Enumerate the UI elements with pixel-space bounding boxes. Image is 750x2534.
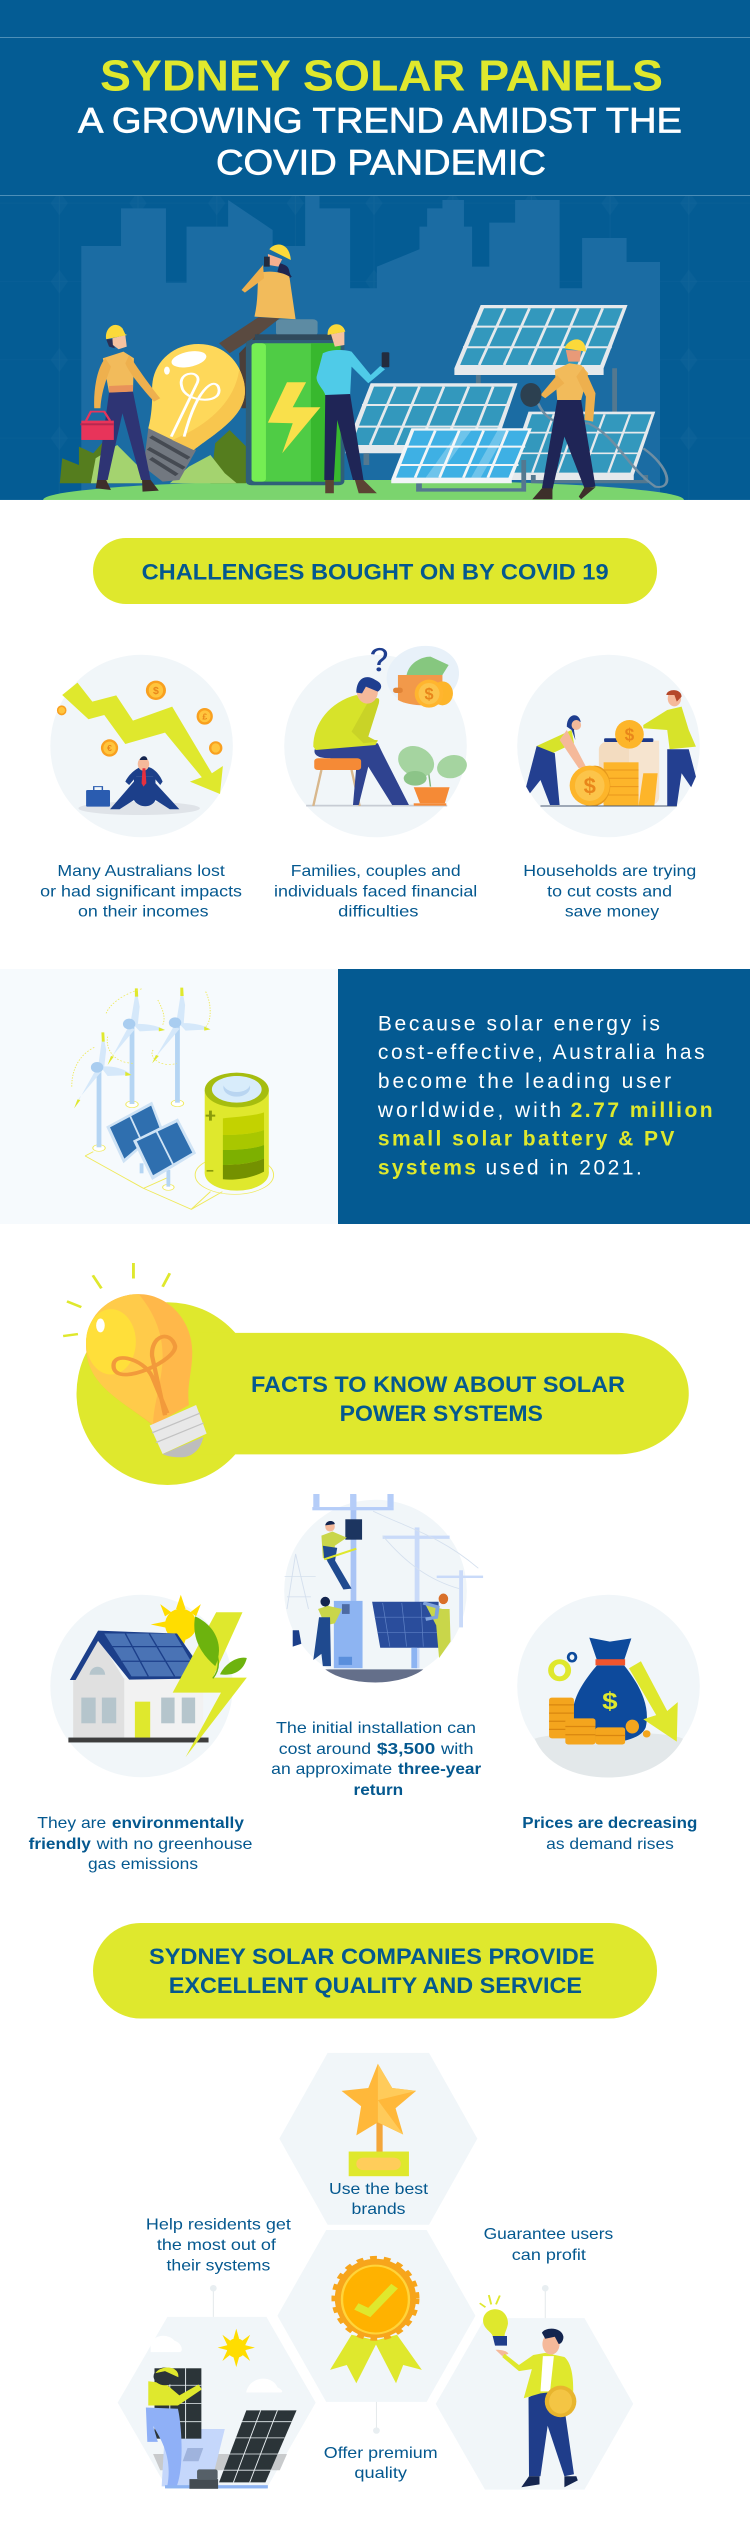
icon: house with solar roof and lightning bolt (68, 1595, 247, 1757)
caption: cost around (279, 1741, 371, 1758)
stat text: 2.77 million (571, 1099, 713, 1122)
icon: money bag with coins and down arrow (535, 1638, 683, 1778)
panel frames (476, 368, 617, 420)
stat text: Because solar energy is (378, 1013, 660, 1036)
caption: Many Australians lost (57, 863, 225, 880)
caption (329, 2181, 429, 2218)
hexagon: best brands (279, 2053, 477, 2225)
section heading: companies: EXCELLENT QUALITY AND SERVICE (169, 1973, 582, 1998)
caption: to cut costs and (547, 884, 672, 901)
caption: gas emissions (88, 1856, 198, 1873)
panel: installation cost (271, 1494, 483, 1799)
caption: their systems (166, 2257, 270, 2274)
icon: couple saving coins in a jar: $ (584, 773, 596, 798)
section heading: challenges: CHALLENGES BOUGHT ON BY COVID 19 (142, 559, 609, 584)
stat text: become the leading user (378, 1070, 671, 1093)
caption: return (354, 1782, 403, 1799)
sitting woman (219, 317, 280, 353)
hero illustration: workers, bulb, battery and solar panels (0, 196, 750, 523)
title: SYDNEY SOLAR PANELS (100, 52, 663, 101)
panel: financial difficulties (274, 641, 477, 921)
stat text: cost-effective, Australia has (378, 1041, 705, 1064)
icon: electricians on power poles with solar panel (285, 1494, 483, 1682)
worker with phone (331, 332, 344, 347)
caption: an approximate (271, 1761, 392, 1778)
panel: prices decreasing (517, 1595, 700, 1853)
caption: with (440, 1741, 474, 1758)
panel: environmentally friendly (29, 1595, 253, 1873)
icon: man holding bulb and coin (480, 2295, 578, 2487)
worker with plug (538, 403, 667, 487)
title: COVID PANDEMIC (216, 143, 546, 183)
title: A GROWING TREND AMIDST THE (78, 101, 682, 141)
section heading: facts with bulb: FACTS TO KNOW ABOUT SOLAR (251, 1372, 625, 1397)
stat text: worldwide, with (377, 1099, 561, 1122)
panel: lost incomes (40, 655, 242, 921)
icon: falling arrow with coins and man: $ (153, 685, 159, 697)
icon: worker fitting solar panels (146, 2329, 297, 2489)
caption: friendly (29, 1836, 91, 1853)
caption: Use the best (329, 2181, 429, 2198)
caption: brands (352, 2201, 406, 2218)
caption (522, 1815, 697, 1853)
panel: cutting costs (517, 655, 700, 921)
caption: They are (37, 1815, 106, 1832)
caption: can profit (512, 2247, 587, 2264)
caption: as demand rises (546, 1836, 674, 1853)
caption: $3,500 (377, 1741, 435, 1758)
section heading: facts with bulb (63, 1263, 689, 1485)
caption: Households are trying (523, 863, 696, 880)
stat text: small solar battery & PV (378, 1128, 674, 1151)
battery (276, 319, 318, 336)
section heading: facts with bulb: POWER SYSTEMS (340, 1401, 543, 1426)
header banner (0, 0, 750, 523)
caption: individuals faced financial (274, 884, 477, 901)
icon: worried person with wallet and plant (306, 641, 472, 806)
caption: with no greenhouse (95, 1836, 253, 1853)
caption: Prices are decreasing (522, 1815, 697, 1832)
caption (40, 863, 242, 921)
caption (271, 1720, 481, 1799)
caption: save money (565, 904, 659, 921)
caption: or had significant impacts (40, 884, 242, 901)
hexagon: guarantee profit (436, 2226, 633, 2490)
caption: Offer premium (324, 2445, 438, 2462)
caption: Guarantee users (484, 2226, 613, 2243)
icon: falling arrow with coins and man: £ (202, 711, 207, 721)
hexagon: premium quality (277, 2230, 475, 2482)
caption (146, 2217, 292, 2274)
icon: worried person with wallet and plant: $ (425, 685, 434, 703)
caption: environmentally (112, 1815, 244, 1832)
stat text: systems (378, 1157, 476, 1180)
icon: falling arrow with coins and man (57, 681, 223, 815)
caption: Help residents get (146, 2217, 292, 2234)
icon: money bag with coins and down arrow: $ (602, 1689, 618, 1715)
caption (484, 2226, 613, 2264)
icon: falling arrow with coins and man: € (107, 743, 112, 753)
icon: medal with ribbon (330, 2259, 422, 2383)
caption (29, 1815, 253, 1873)
panel: Australia statistic (338, 969, 750, 1224)
icon: light bulb (63, 1263, 207, 1457)
caption: Families, couples and (291, 863, 461, 880)
section heading: companies: SYDNEY SOLAR COMPANIES PROVIDE (149, 1944, 594, 1969)
caption (523, 863, 696, 921)
standing worker left (106, 339, 115, 348)
caption: difficulties (338, 904, 418, 921)
bulb (143, 428, 196, 482)
hexagon: most out of systems (118, 2217, 316, 2489)
caption (324, 2445, 438, 2482)
title (78, 52, 682, 183)
panel: illustration of wind turbines, solar panels and battery (0, 969, 338, 1224)
icon: star trophy (342, 2064, 416, 2176)
section heading: challenges (93, 538, 657, 604)
caption: the most out of (157, 2237, 277, 2254)
section heading: companies (93, 1923, 657, 2018)
caption: quality (354, 2465, 407, 2482)
caption: on their incomes (78, 904, 208, 921)
caption: three-year (398, 1761, 481, 1778)
caption: The initial installation can (276, 1720, 476, 1737)
caption (274, 863, 477, 921)
stat text: used in 2021. (486, 1157, 642, 1180)
stat text (377, 1013, 713, 1180)
icon: couple saving coins in a jar: $ (625, 724, 635, 744)
icon: couple saving coins in a jar (526, 690, 696, 806)
